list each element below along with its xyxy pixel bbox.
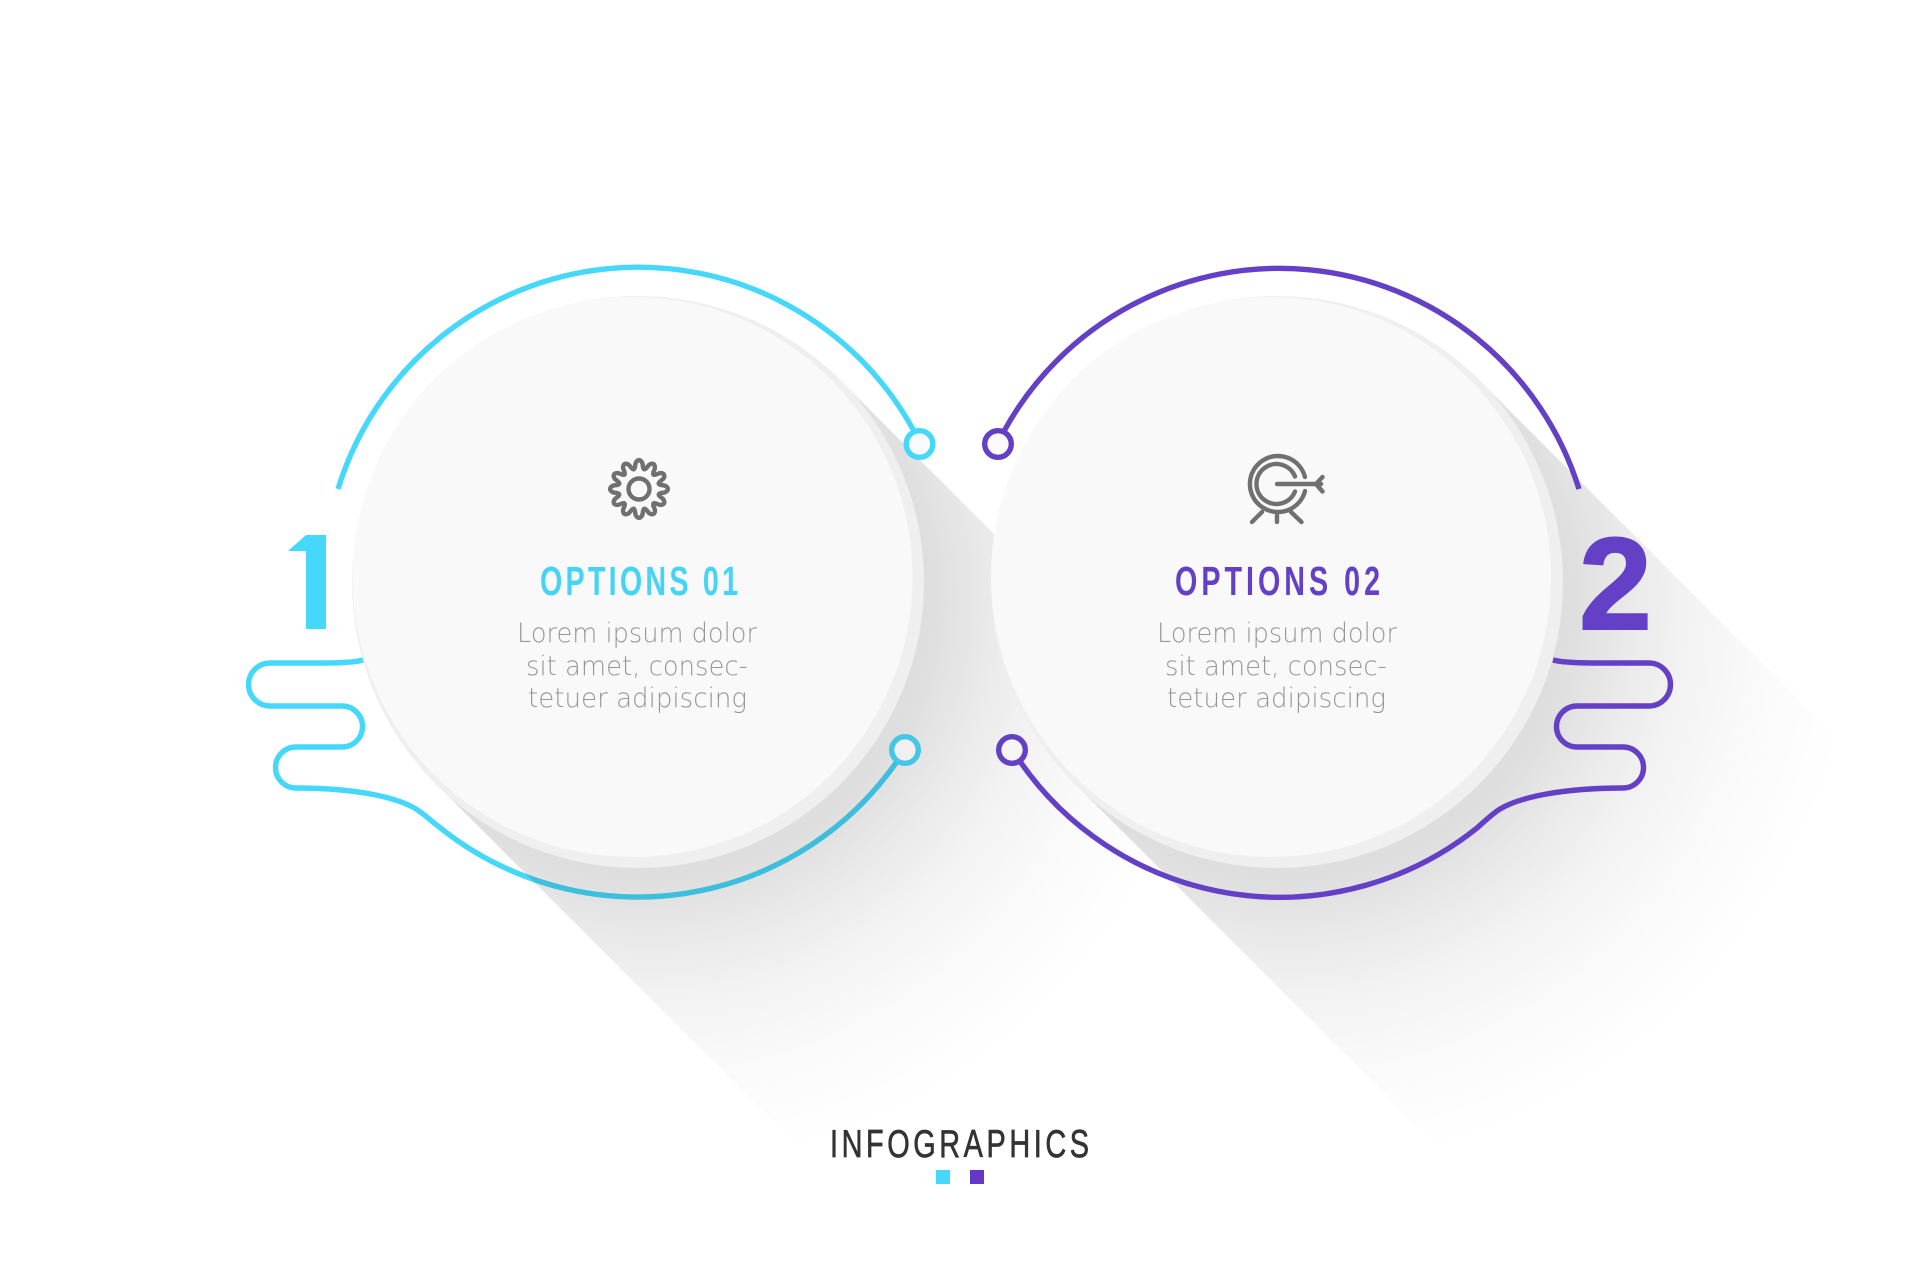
text block: option 2: Lorem ipsum dolor — [1157, 618, 1397, 649]
text block: option 2: sit amet, consec- — [1165, 651, 1387, 682]
outline: option 2 lower arc and squiggle — [1017, 660, 1670, 897]
title: infographics: INFOGRAPHICS — [830, 1123, 1089, 1166]
panel: option 1 — [249, 267, 933, 897]
connector dot: option 1 bottom — [892, 737, 918, 763]
number 2: 2 — [1579, 510, 1652, 657]
number 1: 1 — [276, 510, 349, 657]
number 1 — [288, 535, 326, 629]
connector dot: option 2 top — [985, 431, 1011, 457]
long shadow: option 2 — [1075, 380, 1920, 1280]
outline: option 2 upper arc — [1003, 268, 1579, 489]
text block: option 1 — [517, 618, 757, 714]
long shadow: option 1 — [436, 380, 1370, 1280]
heading: options 01: OPTIONS 01 — [540, 559, 738, 604]
heading: options 02: OPTIONS 02 — [1175, 559, 1380, 604]
text block: option 2: tetuer adipiscing — [1167, 683, 1386, 714]
text block: option 1: sit amet, consec- — [526, 651, 748, 682]
connector dot: option 1 top — [906, 431, 933, 457]
icon: target with arrow — [1250, 456, 1322, 522]
icon: gear — [610, 460, 668, 518]
outline: option 1 upper arc — [338, 267, 915, 489]
disc: option 1 — [352, 296, 924, 868]
disc: option 2 — [991, 296, 1563, 868]
legend squares — [936, 1170, 984, 1184]
text block: option 2 — [1157, 618, 1397, 714]
text block: option 1: Lorem ipsum dolor — [517, 618, 757, 649]
text block: option 1: tetuer adipiscing — [528, 683, 747, 714]
outline: option 1 lower arc and squiggle — [249, 660, 900, 897]
connector dot: option 2 bottom — [999, 737, 1025, 763]
panel: option 2 — [985, 268, 1670, 897]
